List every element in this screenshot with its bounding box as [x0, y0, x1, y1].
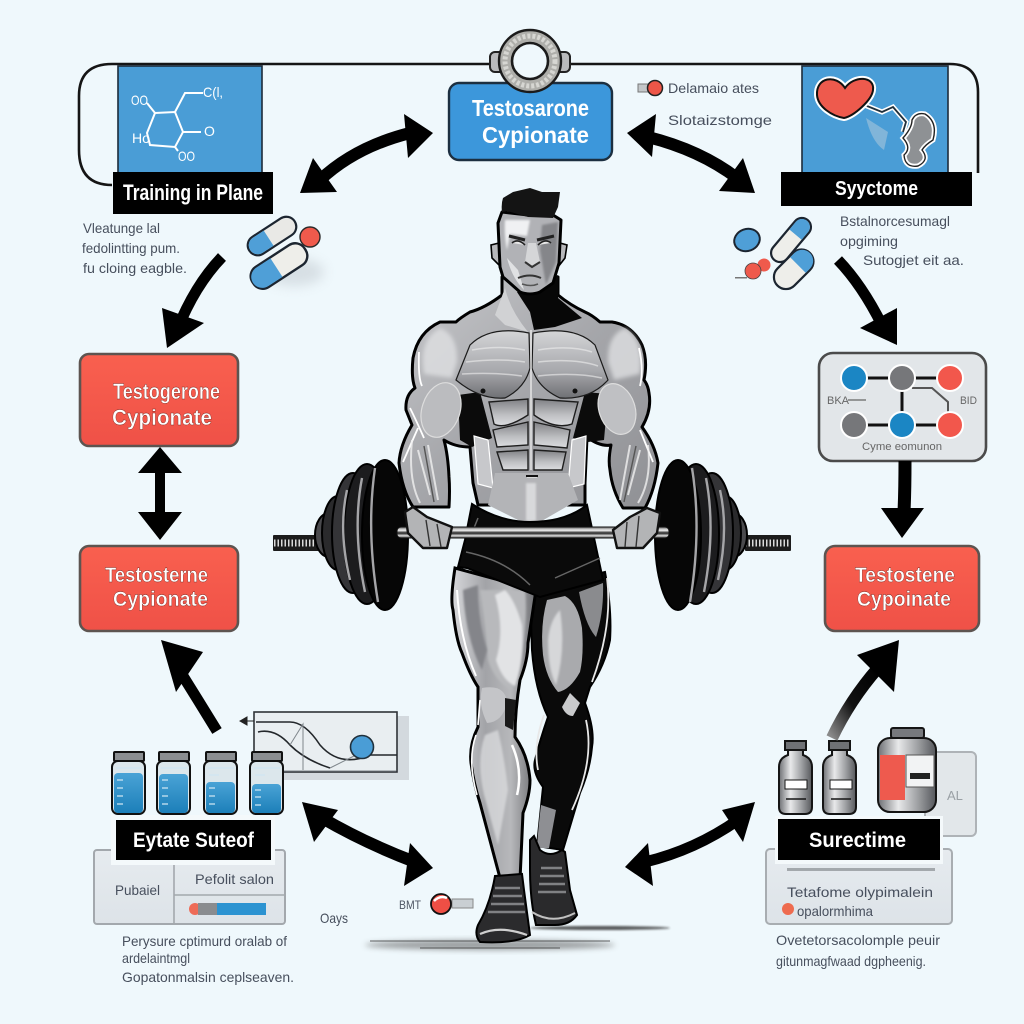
callout: lower marker: BMT	[399, 898, 422, 912]
chart: decay curve	[240, 712, 409, 780]
panel: lower right note box: opalormhima	[797, 903, 873, 919]
text block: lower left note: Gopatonmalsin ceplseaven.	[122, 969, 294, 985]
right thigh highlights	[542, 596, 583, 692]
right shin detail	[537, 805, 556, 848]
left shoe	[476, 874, 530, 942]
obliques	[474, 436, 586, 488]
text block: top right note: opgiming	[840, 233, 898, 249]
panel: network diagram: BKA	[827, 395, 850, 407]
abs	[489, 399, 578, 470]
hands	[405, 507, 452, 548]
hair	[502, 188, 560, 218]
arrow: left red double	[138, 447, 182, 540]
icon: molecule diagram	[131, 84, 223, 164]
heading: Eytate Suteof	[111, 815, 275, 865]
panel: network diagram: Cyme eomunon	[862, 441, 942, 453]
heading: Training in Plane: Training in Plane	[123, 180, 263, 205]
icon: molecule diagram: C(l,	[203, 84, 223, 100]
text block: top left note: fedolintting pum.	[82, 240, 180, 256]
central figure: athlete with barbell	[273, 188, 791, 942]
floor shadow	[365, 926, 670, 950]
right leg	[530, 572, 610, 850]
left leg muscles	[457, 585, 526, 845]
bar	[397, 527, 669, 538]
text block: top right note: Sutogjet eit aa.	[863, 252, 964, 268]
right plates	[655, 460, 747, 610]
panel: red box right: Testostene	[855, 564, 955, 587]
arrow: lower right double	[625, 802, 755, 886]
panel: lower left table: Pefolit salon	[195, 871, 274, 887]
lower belly	[488, 473, 578, 522]
arrow: lower left double	[302, 802, 433, 886]
panel: network diagram: BID	[960, 395, 977, 407]
text block: top right note: Bstalnorcesumagl	[840, 213, 950, 229]
panel: red box right	[825, 546, 979, 631]
text block: lower right note: Ovetetorsacolomple peuir	[776, 932, 940, 948]
left leg	[452, 568, 536, 880]
panel: back note: AL	[947, 788, 963, 803]
pec striations	[462, 348, 602, 378]
arrow: chart to left red	[161, 640, 217, 731]
ears	[491, 243, 567, 267]
left plate highlights	[343, 468, 378, 602]
panel: molecule training plane	[118, 66, 262, 174]
network nodes	[841, 365, 963, 438]
shoulder contour lines	[403, 348, 653, 462]
arrow: network to red	[881, 461, 924, 538]
text block: lower left note: ardelaintmgl	[122, 950, 190, 966]
panel: red box left upper: Cypionate	[112, 405, 212, 430]
label: Oays: Oays	[320, 910, 348, 926]
icon: heart	[817, 79, 934, 166]
shorts	[458, 504, 603, 597]
nose and mouth	[525, 243, 540, 266]
text block: top right note	[840, 213, 964, 268]
panel: lower left table	[94, 850, 285, 924]
panel: red box left lower: Cypionate	[113, 588, 208, 611]
forearm details	[411, 440, 649, 503]
panel: center blue title: Testosarone	[472, 95, 589, 121]
arrow: bottles to right red	[832, 640, 899, 738]
belly line	[527, 330, 537, 477]
text block: top left note: fu cloing eagble.	[83, 260, 187, 276]
heading: Syyctome: Syyctome	[835, 178, 918, 200]
top bracket connector	[79, 64, 978, 185]
brows and eyes	[509, 236, 554, 240]
text block: top left note	[82, 220, 187, 276]
arrow: pills to left red box	[162, 257, 222, 348]
icon: pills right	[731, 214, 818, 294]
heading: Eytate Suteof: Eytate Suteof	[133, 829, 255, 852]
panel: red box left lower: Testosterne	[105, 564, 208, 587]
heading: Syyctome	[781, 172, 972, 206]
text block: lower right note	[776, 932, 940, 969]
callout: top legend: Delamaio ates	[668, 80, 759, 96]
panel: lower right note box	[766, 849, 952, 924]
panel: center blue title	[449, 83, 612, 160]
head	[498, 212, 561, 294]
panel: back note	[925, 752, 976, 836]
panel: lower left table: Pubaiel	[115, 882, 160, 898]
neck shadow	[517, 275, 582, 330]
panel: lower right note box: Tetafome olypimalein	[787, 884, 933, 900]
torso and arms base	[399, 277, 658, 508]
biceps	[414, 377, 642, 443]
pecs	[456, 331, 608, 398]
arrow: training to title	[300, 114, 433, 193]
callout: top legend	[638, 80, 772, 128]
text block: lower right note: gitunmagfwaad dgpheenig.	[776, 953, 926, 969]
panel: network diagram	[819, 353, 986, 461]
text block: lower left note: Perysure cptimurd oralab of	[122, 933, 287, 949]
barbell thread right	[745, 535, 791, 551]
icon: blue vials	[112, 752, 283, 814]
left plates	[315, 460, 408, 610]
arrow: pills to network	[838, 260, 897, 345]
barbell thread left	[273, 535, 319, 551]
arrow: title to system	[627, 114, 755, 193]
callout: lower marker	[399, 894, 473, 914]
icon: molecule diagram: OO	[178, 148, 195, 164]
callout: top legend: Slotaizstomge	[668, 112, 772, 128]
icon: supplement bottles	[779, 728, 936, 814]
panel: red box right: Cypoinate	[857, 588, 951, 611]
text block: lower left note	[122, 933, 294, 985]
dark side creases	[458, 392, 608, 447]
text block: top left note: Vleatunge lal	[83, 220, 160, 236]
panel: center blue title: Cypionate	[482, 122, 589, 148]
icon: pills left	[244, 213, 324, 293]
face light	[505, 220, 530, 250]
top ring connector icon	[490, 30, 570, 92]
right shoe	[530, 836, 577, 925]
heading: Surectime: Surectime	[809, 829, 906, 852]
icon: molecule diagram: O	[204, 123, 215, 139]
right plate highlights	[690, 468, 724, 602]
heading: Training in Plane	[113, 172, 273, 214]
icon: molecule diagram: OO	[131, 92, 148, 108]
panel: red box left lower	[80, 546, 238, 631]
panel: red box left upper	[80, 354, 238, 446]
heading: Surectime	[775, 816, 943, 864]
panel: heart system	[802, 66, 948, 174]
icon: molecule diagram: Ho	[132, 130, 150, 146]
panel: red box left upper: Testogerone	[113, 379, 220, 404]
color bar	[189, 903, 266, 915]
